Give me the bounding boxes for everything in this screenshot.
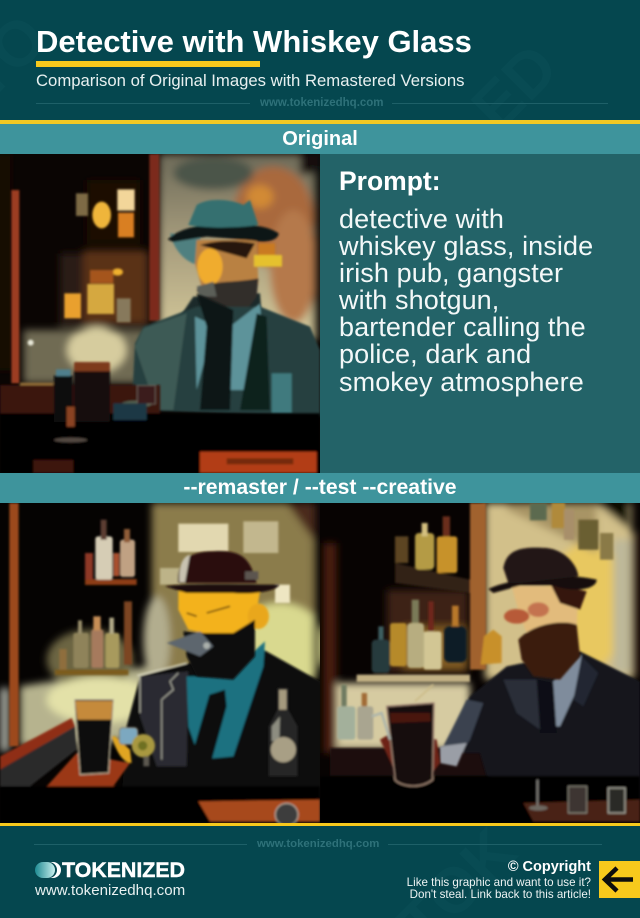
prompt text: bartender calling the <box>339 312 586 342</box>
copyright notice: © Copyright <box>508 859 591 875</box>
head <box>488 548 597 680</box>
face, hat <box>165 551 279 680</box>
glass and counter <box>320 685 640 823</box>
hat and head <box>167 200 282 337</box>
prompt heading: Prompt: <box>339 166 441 196</box>
subtitle: Comparison of Original Images with Remastered Versions <box>36 71 464 90</box>
title underline <box>36 61 260 67</box>
text: ED <box>458 30 571 144</box>
bar and glasses <box>0 362 320 473</box>
prompt text: detective with <box>339 204 504 234</box>
bottles <box>85 579 137 585</box>
bottom yellow rule <box>0 823 640 826</box>
section bar: remaster: --remaster / --test --creative <box>183 476 457 499</box>
suit <box>120 641 320 823</box>
logo wordmark: TOKENIZED <box>62 858 185 882</box>
image: remaster version one <box>0 503 320 823</box>
section bar: original: Original <box>282 128 358 150</box>
logo <box>35 858 185 899</box>
jacket <box>440 651 640 800</box>
bottles and shelves <box>395 563 470 593</box>
jacket <box>132 293 320 417</box>
logo url: www.tokenizedhq.com <box>35 882 185 899</box>
prompt text: whiskey glass, inside <box>339 231 593 261</box>
image: remaster version two <box>320 503 640 823</box>
logo icon <box>35 862 61 878</box>
prompt text: police, dark and <box>339 339 531 369</box>
panel: prompt <box>320 154 640 473</box>
prompt text: smokey atmosphere <box>339 367 584 397</box>
section bar: remaster <box>0 473 640 503</box>
section bar: original <box>0 120 640 154</box>
title: Detective with Whiskey Glass <box>36 24 472 59</box>
footer website url: www.tokenizedhq.com <box>257 838 379 850</box>
prompt text <box>339 204 593 397</box>
copyright notice: Don't steal. Link back to this article! <box>410 888 591 901</box>
image: original detective painting <box>0 154 320 473</box>
prompt text: with shotgun, <box>339 285 499 315</box>
icon: back arrow <box>599 861 640 898</box>
header website url: www.tokenizedhq.com <box>260 97 384 109</box>
prompt text: irish pub, gangster <box>339 258 563 288</box>
bar, pint, badge, bottle <box>0 688 320 826</box>
copyright notice: Like this graphic and want to use it? <box>407 876 591 889</box>
copyright notice <box>407 859 591 901</box>
